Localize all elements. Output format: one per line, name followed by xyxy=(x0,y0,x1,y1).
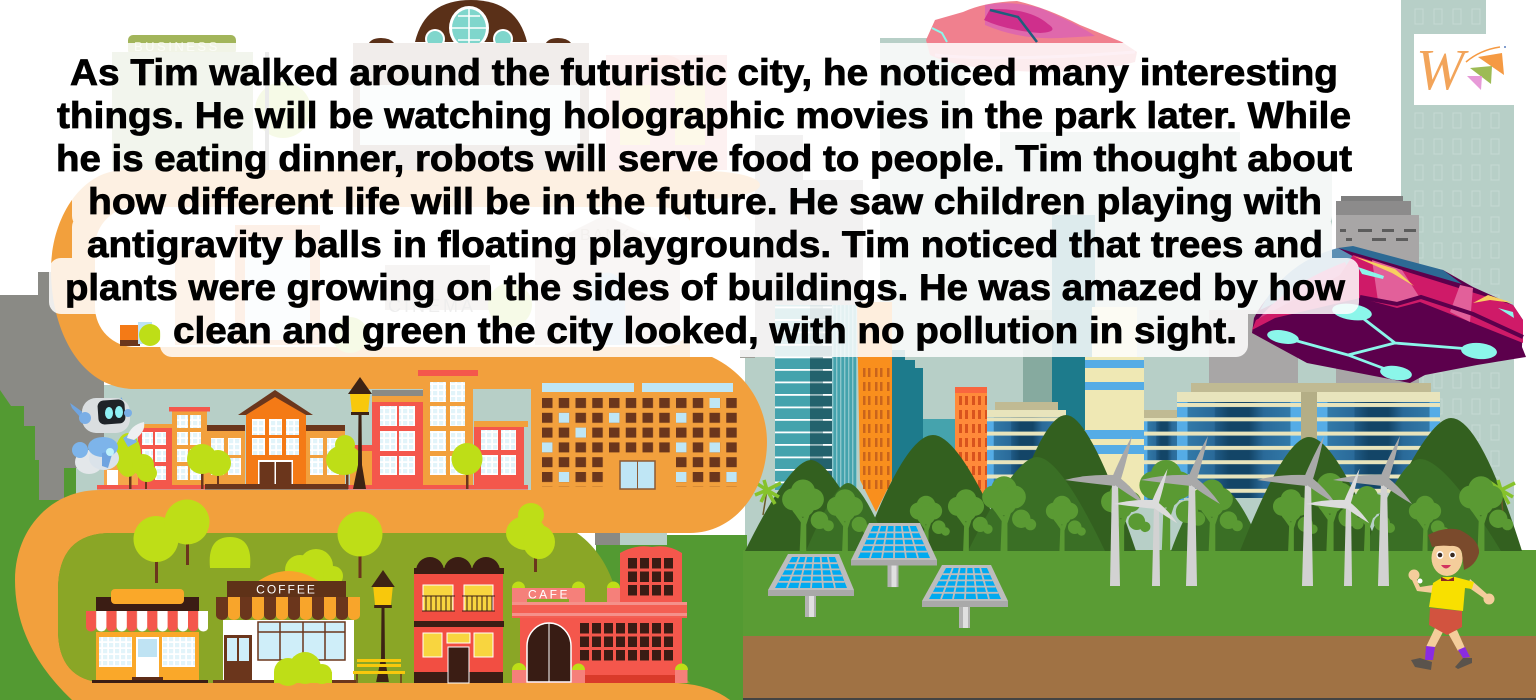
boy walking xyxy=(1408,529,1494,670)
blue office buildings xyxy=(987,307,1440,500)
lower park lawn xyxy=(58,533,690,683)
background: sky tower with logo plate xyxy=(1401,0,1514,550)
wind turbines xyxy=(1065,436,1412,586)
flying car xyxy=(1252,246,1526,383)
faded upper street interior xyxy=(95,207,700,353)
story paragraph xyxy=(56,52,1352,351)
orange towers xyxy=(857,302,987,512)
upper street buildings xyxy=(97,370,528,490)
shop: striped awning store xyxy=(86,589,208,683)
shop: coffee house xyxy=(213,571,360,686)
red townhouse xyxy=(414,557,504,683)
story paragraph: As Tim walked around the futuristic city, he noticed many interesting xyxy=(70,52,1338,93)
teal mid towers xyxy=(892,310,1085,490)
faded town behind text: BUSINESS xyxy=(134,39,220,54)
orange winding road xyxy=(15,170,767,700)
left grey buildings and green steps xyxy=(0,272,544,520)
ground: grass and soil path xyxy=(0,500,1536,700)
hills xyxy=(745,415,1522,551)
faded town behind text xyxy=(112,0,727,170)
cafe building xyxy=(512,546,688,683)
story paragraph: he is eating dinner, robots will serve food to people. Tim thought about xyxy=(56,138,1352,179)
street lamp xyxy=(348,377,372,489)
palm trees xyxy=(753,480,1515,515)
teal glass tower xyxy=(775,305,857,490)
story paragraph: plants were growing on the sides of buildings. He was amazed by how xyxy=(65,267,1345,308)
story paragraph: clean and green the city looked, with no pollution in sight. xyxy=(173,310,1237,351)
background: city skyline blocks xyxy=(740,38,1419,552)
street lamp and bench xyxy=(353,570,405,683)
faded upper street interior: BANK xyxy=(580,227,632,244)
cafe building: CAFE xyxy=(528,588,570,602)
story paragraph: antigravity balls in floating playgrounds. Tim noticed that trees and xyxy=(87,224,1323,265)
forest trees xyxy=(782,460,1513,551)
story paragraph: things. He will be watching holographic movies in the park later. While xyxy=(57,95,1351,136)
park trees xyxy=(134,500,555,586)
big orange apartment block xyxy=(531,383,743,489)
story paragraph: how different life will be in the future. He saw children playing with xyxy=(88,181,1322,222)
shop: coffee house: COFFEE xyxy=(256,582,317,596)
logo plate: W xyxy=(1416,37,1469,102)
logo plate xyxy=(1414,34,1514,105)
solar panels xyxy=(768,523,1008,628)
translucent text backing xyxy=(47,43,1360,357)
upper street trees xyxy=(115,433,482,489)
faded upper street interior: CINEMA xyxy=(388,296,476,316)
top flying car xyxy=(926,1,1137,72)
robot xyxy=(70,397,144,474)
upper road bend end xyxy=(650,171,760,199)
